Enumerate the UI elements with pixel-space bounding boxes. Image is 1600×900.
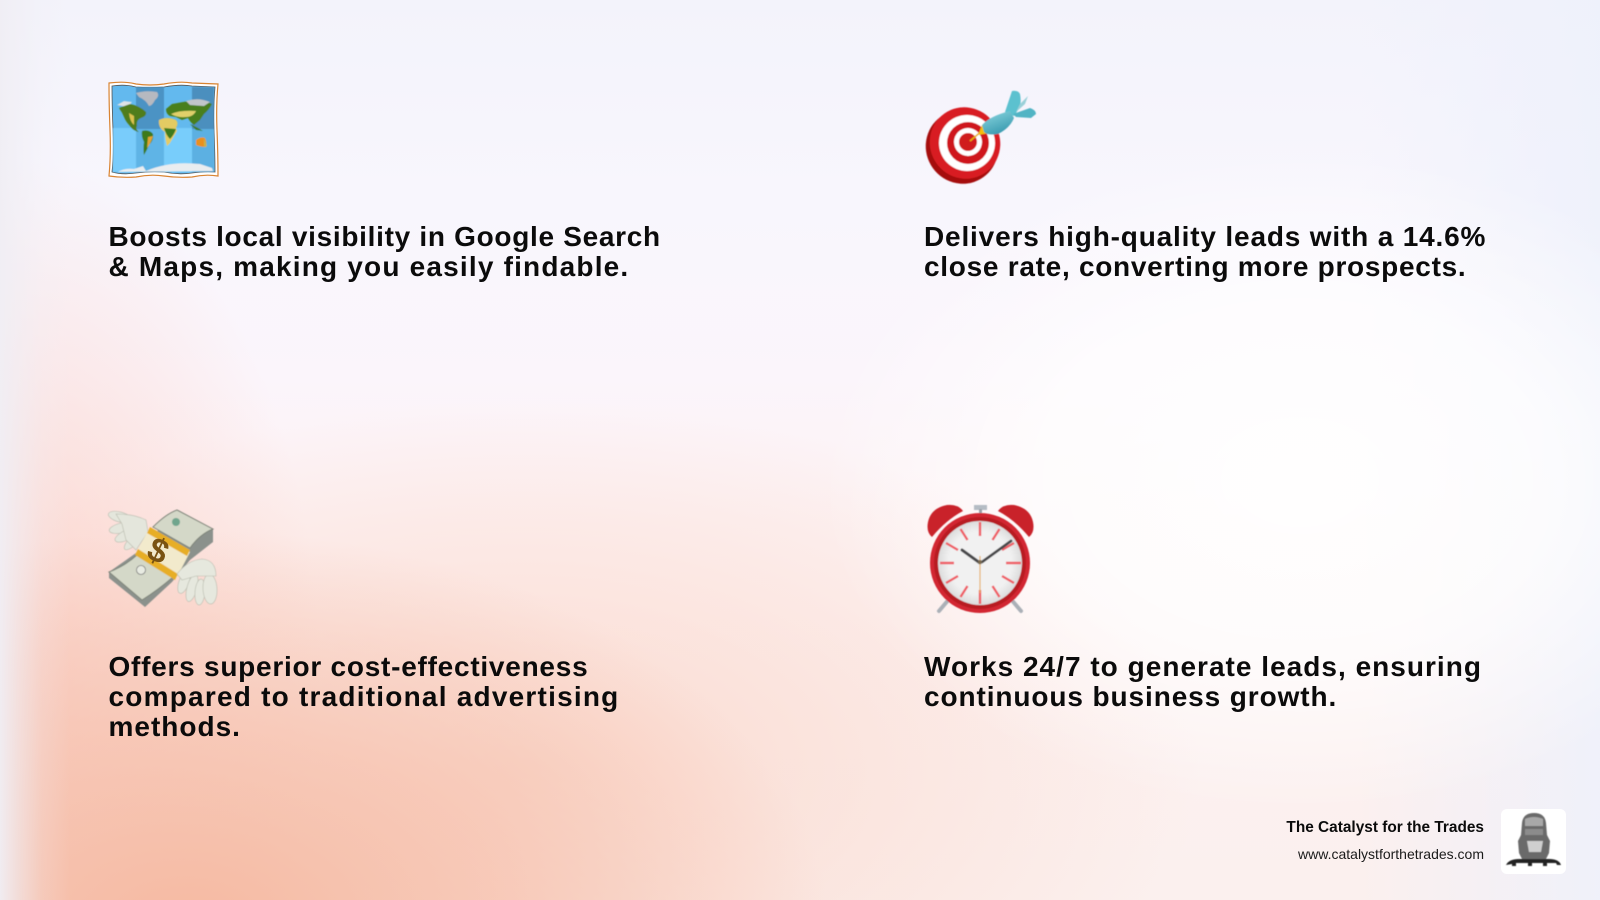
dart (970, 130, 983, 141)
text: lead quality: close rate, converting more prospects. (924, 251, 1466, 282)
text: cost-effectiveness: methods. (108, 711, 241, 742)
text: cost-effectiveness (108, 651, 620, 742)
hands (962, 550, 980, 563)
bells (928, 505, 963, 537)
footer brand (1286, 809, 1566, 874)
Greenland (136, 91, 158, 106)
icon: flying money (108, 509, 218, 608)
website: www.catalystforthetrades.com (1298, 846, 1484, 862)
australia (196, 137, 206, 147)
knob (974, 505, 987, 510)
text: local visibility (108, 221, 661, 282)
clouds (118, 163, 213, 172)
brand name: The Catalyst for the Trades (1286, 819, 1484, 836)
left wing (107, 509, 148, 552)
legs (939, 598, 950, 611)
south america (142, 130, 153, 155)
eurasia (166, 100, 212, 125)
icon: alarm clock (926, 504, 1034, 614)
north america (119, 104, 146, 132)
notes (109, 510, 213, 607)
logo: microphone (1501, 809, 1566, 874)
dollar sign: $ (141, 530, 175, 572)
band (136, 527, 190, 579)
icon: world map (108, 82, 219, 178)
text: lead quality: Delivers high-quality leads with a 14.6% (924, 221, 1486, 252)
body (930, 513, 1030, 613)
indonesia (190, 124, 203, 131)
text: local visibility: Boosts local visibility in Google Search (108, 221, 661, 252)
icon: bullseye with dart (924, 90, 1037, 185)
africa (159, 118, 178, 146)
text: always on: Works 24/7 to generate leads, ensuring (924, 651, 1482, 682)
right wing (175, 559, 218, 605)
text: local visibility: & Maps, making you easily findable. (108, 251, 629, 282)
text: always on: continuous business growth. (924, 681, 1337, 712)
ticks (940, 522, 1021, 604)
text: cost-effectiveness: Offers superior cost-effectiveness (108, 651, 588, 682)
text: always on (924, 651, 1482, 712)
text: lead quality (924, 221, 1486, 282)
text: cost-effectiveness: compared to traditional advertising (108, 681, 620, 712)
